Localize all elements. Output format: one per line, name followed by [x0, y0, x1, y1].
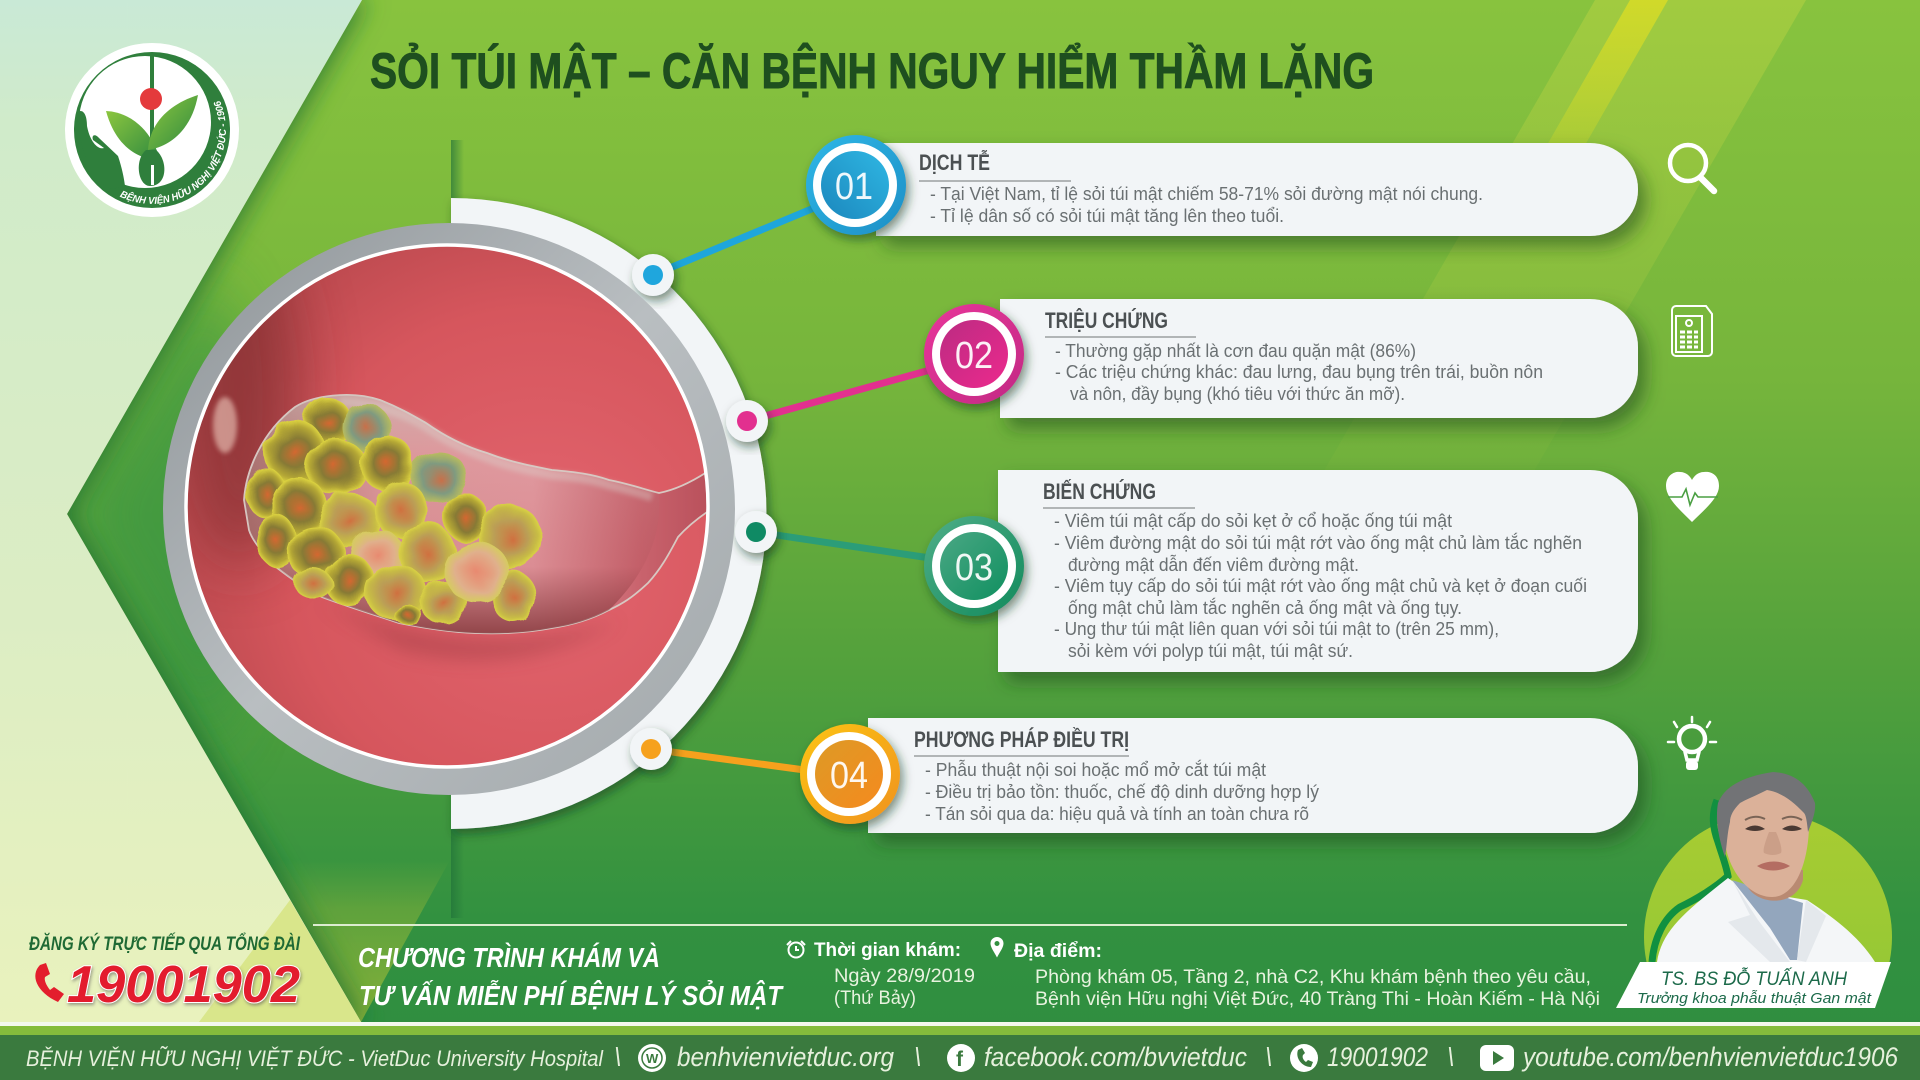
program heading: TƯ VẤN MIỄN PHÍ BỆNH LÝ SỎI MẬT — [359, 979, 784, 1011]
heading: trieu chung: TRIỆU CHỨNG — [1045, 308, 1168, 333]
chevron left panel — [0, 0, 450, 1022]
panel: bien chung: - Viêm tụy cấp do sỏi túi mật rớt vào ống mật chủ và kẹt ở đoạn cuối — [1054, 576, 1587, 596]
panel: trieu chung — [1000, 299, 1638, 418]
icon: website — [638, 1044, 666, 1072]
panel: dich te — [876, 143, 1638, 236]
location info: Bệnh viện Hữu nghị Việt Đức, 40 Tràng Thi - Hoàn Kiếm - Hà Nội — [1035, 989, 1600, 1010]
heading: bien chung: BIẾN CHỨNG — [1043, 479, 1156, 504]
white half ring — [451, 198, 767, 829]
footer bars — [0, 1022, 1920, 1080]
logo — [65, 43, 239, 217]
footer contact strip: benhvienvietduc.org — [677, 1042, 894, 1072]
gallbladder — [244, 395, 710, 633]
location info — [990, 937, 1600, 1010]
panel: dich te: - Tại Việt Nam, tỉ lệ sỏi túi mật chiếm 58-71% sỏi đường mật nói chung. — [930, 184, 1483, 204]
time info — [787, 940, 975, 1009]
connector nodes — [630, 254, 777, 770]
footer contact strip — [26, 1042, 1899, 1072]
panel: bien chung — [998, 470, 1638, 672]
location info: Địa điểm: — [1014, 941, 1102, 962]
program heading — [358, 942, 784, 1011]
icon: alarm clock — [787, 941, 805, 958]
phone call to action — [29, 933, 301, 1014]
doctor name plate — [1616, 962, 1891, 1008]
icon: phone — [1290, 1044, 1318, 1072]
icon: light bulb — [1668, 717, 1716, 770]
vertical bars — [451, 140, 464, 918]
badge 03: 03 — [955, 547, 993, 589]
panel: bien chung: sỏi kèm với polyp túi mật, túi mật sứ. — [1068, 641, 1353, 661]
phone call to action: ĐĂNG KÝ TRỰC TIẾP QUA TỔNG ĐÀI — [29, 933, 301, 955]
photo white rim — [186, 245, 708, 767]
logo: BỆNH VIỆN HỮU NGHỊ VIỆT ĐỨC - 1906 — [120, 101, 226, 205]
panel: phuong phap dieu tri: - Điều trị bảo tồn: thuốc, chế độ dinh dưỡng hợp lý — [925, 782, 1319, 802]
icon: heart — [1666, 472, 1719, 522]
time info: Thời gian khám: — [814, 940, 961, 961]
icon: location pin — [990, 937, 1004, 958]
panel: dich te: - Tỉ lệ dân số có sỏi túi mật tăng lên theo tuổi. — [930, 206, 1284, 226]
doctor coat — [1657, 878, 1875, 962]
doctor portrait — [1644, 772, 1892, 962]
icon: facebook — [947, 1044, 975, 1072]
badge 03 — [924, 516, 1024, 616]
footer contact strip: \ — [1447, 1042, 1454, 1072]
doctor head — [1745, 870, 1803, 901]
panel: trieu chung: - Thường gặp nhất là cơn đau quặn mật (86%) — [1055, 341, 1416, 361]
heading: dich te: DỊCH TỄ — [919, 149, 990, 175]
panel: phuong phap dieu tri: - Phẫu thuật nội soi hoặc mổ mở cắt túi mật — [925, 759, 1266, 780]
doctor name plate: TS. BS ĐỖ TUẤN ANH — [1661, 968, 1847, 990]
heading: phuong phap dieu tri: PHƯƠNG PHÁP ĐIỀU TRỊ — [914, 727, 1129, 752]
connector line 03 — [756, 532, 930, 558]
panel: bien chung: - Viêm đường mật do sỏi túi mật rớt vào ống mật chủ làm tắc nghẽn — [1054, 532, 1582, 553]
panel: bien chung: ống mật chủ làm tắc nghẽn cả ống mật và ống tụy. — [1068, 597, 1462, 618]
icon: youtube — [1480, 1045, 1514, 1071]
footer contact strip: \ — [1265, 1042, 1272, 1072]
connector line 04 — [650, 749, 812, 771]
badge 01 — [806, 135, 906, 235]
panel: phuong phap dieu tri: - Tán sỏi qua da: hiệu quả và tính an toàn chưa rõ — [925, 804, 1309, 824]
stones — [246, 398, 541, 625]
connector line 02 — [747, 370, 930, 421]
badge 04: 04 — [830, 755, 868, 797]
divider and program section — [313, 924, 1627, 926]
gray ring — [163, 223, 735, 795]
badge 01: 01 — [835, 166, 873, 208]
footer contact strip: \ — [914, 1042, 921, 1072]
panel: bien chung: đường mật dẫn đến viêm đường mật. — [1068, 554, 1359, 575]
panel: bien chung: - Viêm túi mật cấp do sỏi kẹt ở cổ hoặc ống túi mật — [1054, 511, 1452, 531]
footer contact strip: facebook.com/bvvietduc — [984, 1042, 1247, 1072]
icon: website: W — [646, 1051, 659, 1066]
badge 02: 02 — [955, 335, 993, 377]
decorative diagonal stripes — [1290, 0, 1806, 530]
footer contact strip: 19001902 — [1327, 1042, 1428, 1072]
icon: magnifier — [1670, 145, 1714, 191]
panel: trieu chung: - Các triệu chứng khác: đau lưng, đau bụng trên trái, buồn nôn — [1055, 362, 1543, 382]
footer contact strip: \ — [614, 1042, 621, 1072]
time info: Ngày 28/9/2019 — [834, 966, 975, 987]
title: SỎI TÚI MẬT – CĂN BỆNH NGUY HIỂM THẦM LẶNG — [370, 42, 1374, 99]
footer contact strip: BỆNH VIỆN HỮU NGHỊ VIỆT ĐỨC - VietDuc University Hospital — [26, 1046, 604, 1071]
panel: bien chung: - Ung thư túi mật liên quan với sỏi túi mật to (trên 25 mm), — [1054, 619, 1499, 639]
badge 02 — [924, 304, 1024, 404]
badge 04 — [800, 724, 900, 824]
icon: facebook: f — [956, 1048, 964, 1071]
connector line 01 — [653, 203, 826, 275]
time info: (Thứ Bảy) — [834, 988, 916, 1009]
doctor name plate: Trưởng khoa phẫu thuật Gan mật — [1637, 990, 1872, 1007]
gallstone illustration — [180, 230, 711, 770]
program heading: CHƯƠNG TRÌNH KHÁM VÀ — [358, 942, 660, 973]
icon: document — [1672, 306, 1712, 356]
phone call to action: 19001902 — [67, 956, 300, 1014]
panel: trieu chung: và nôn, đầy bụng (khó tiêu với thức ăn mỡ). — [1070, 384, 1405, 404]
location info: Phòng khám 05, Tầng 2, nhà C2, Khu khám bệnh theo yêu cầu, — [1035, 967, 1591, 988]
panel: phuong phap dieu tri — [868, 718, 1638, 833]
